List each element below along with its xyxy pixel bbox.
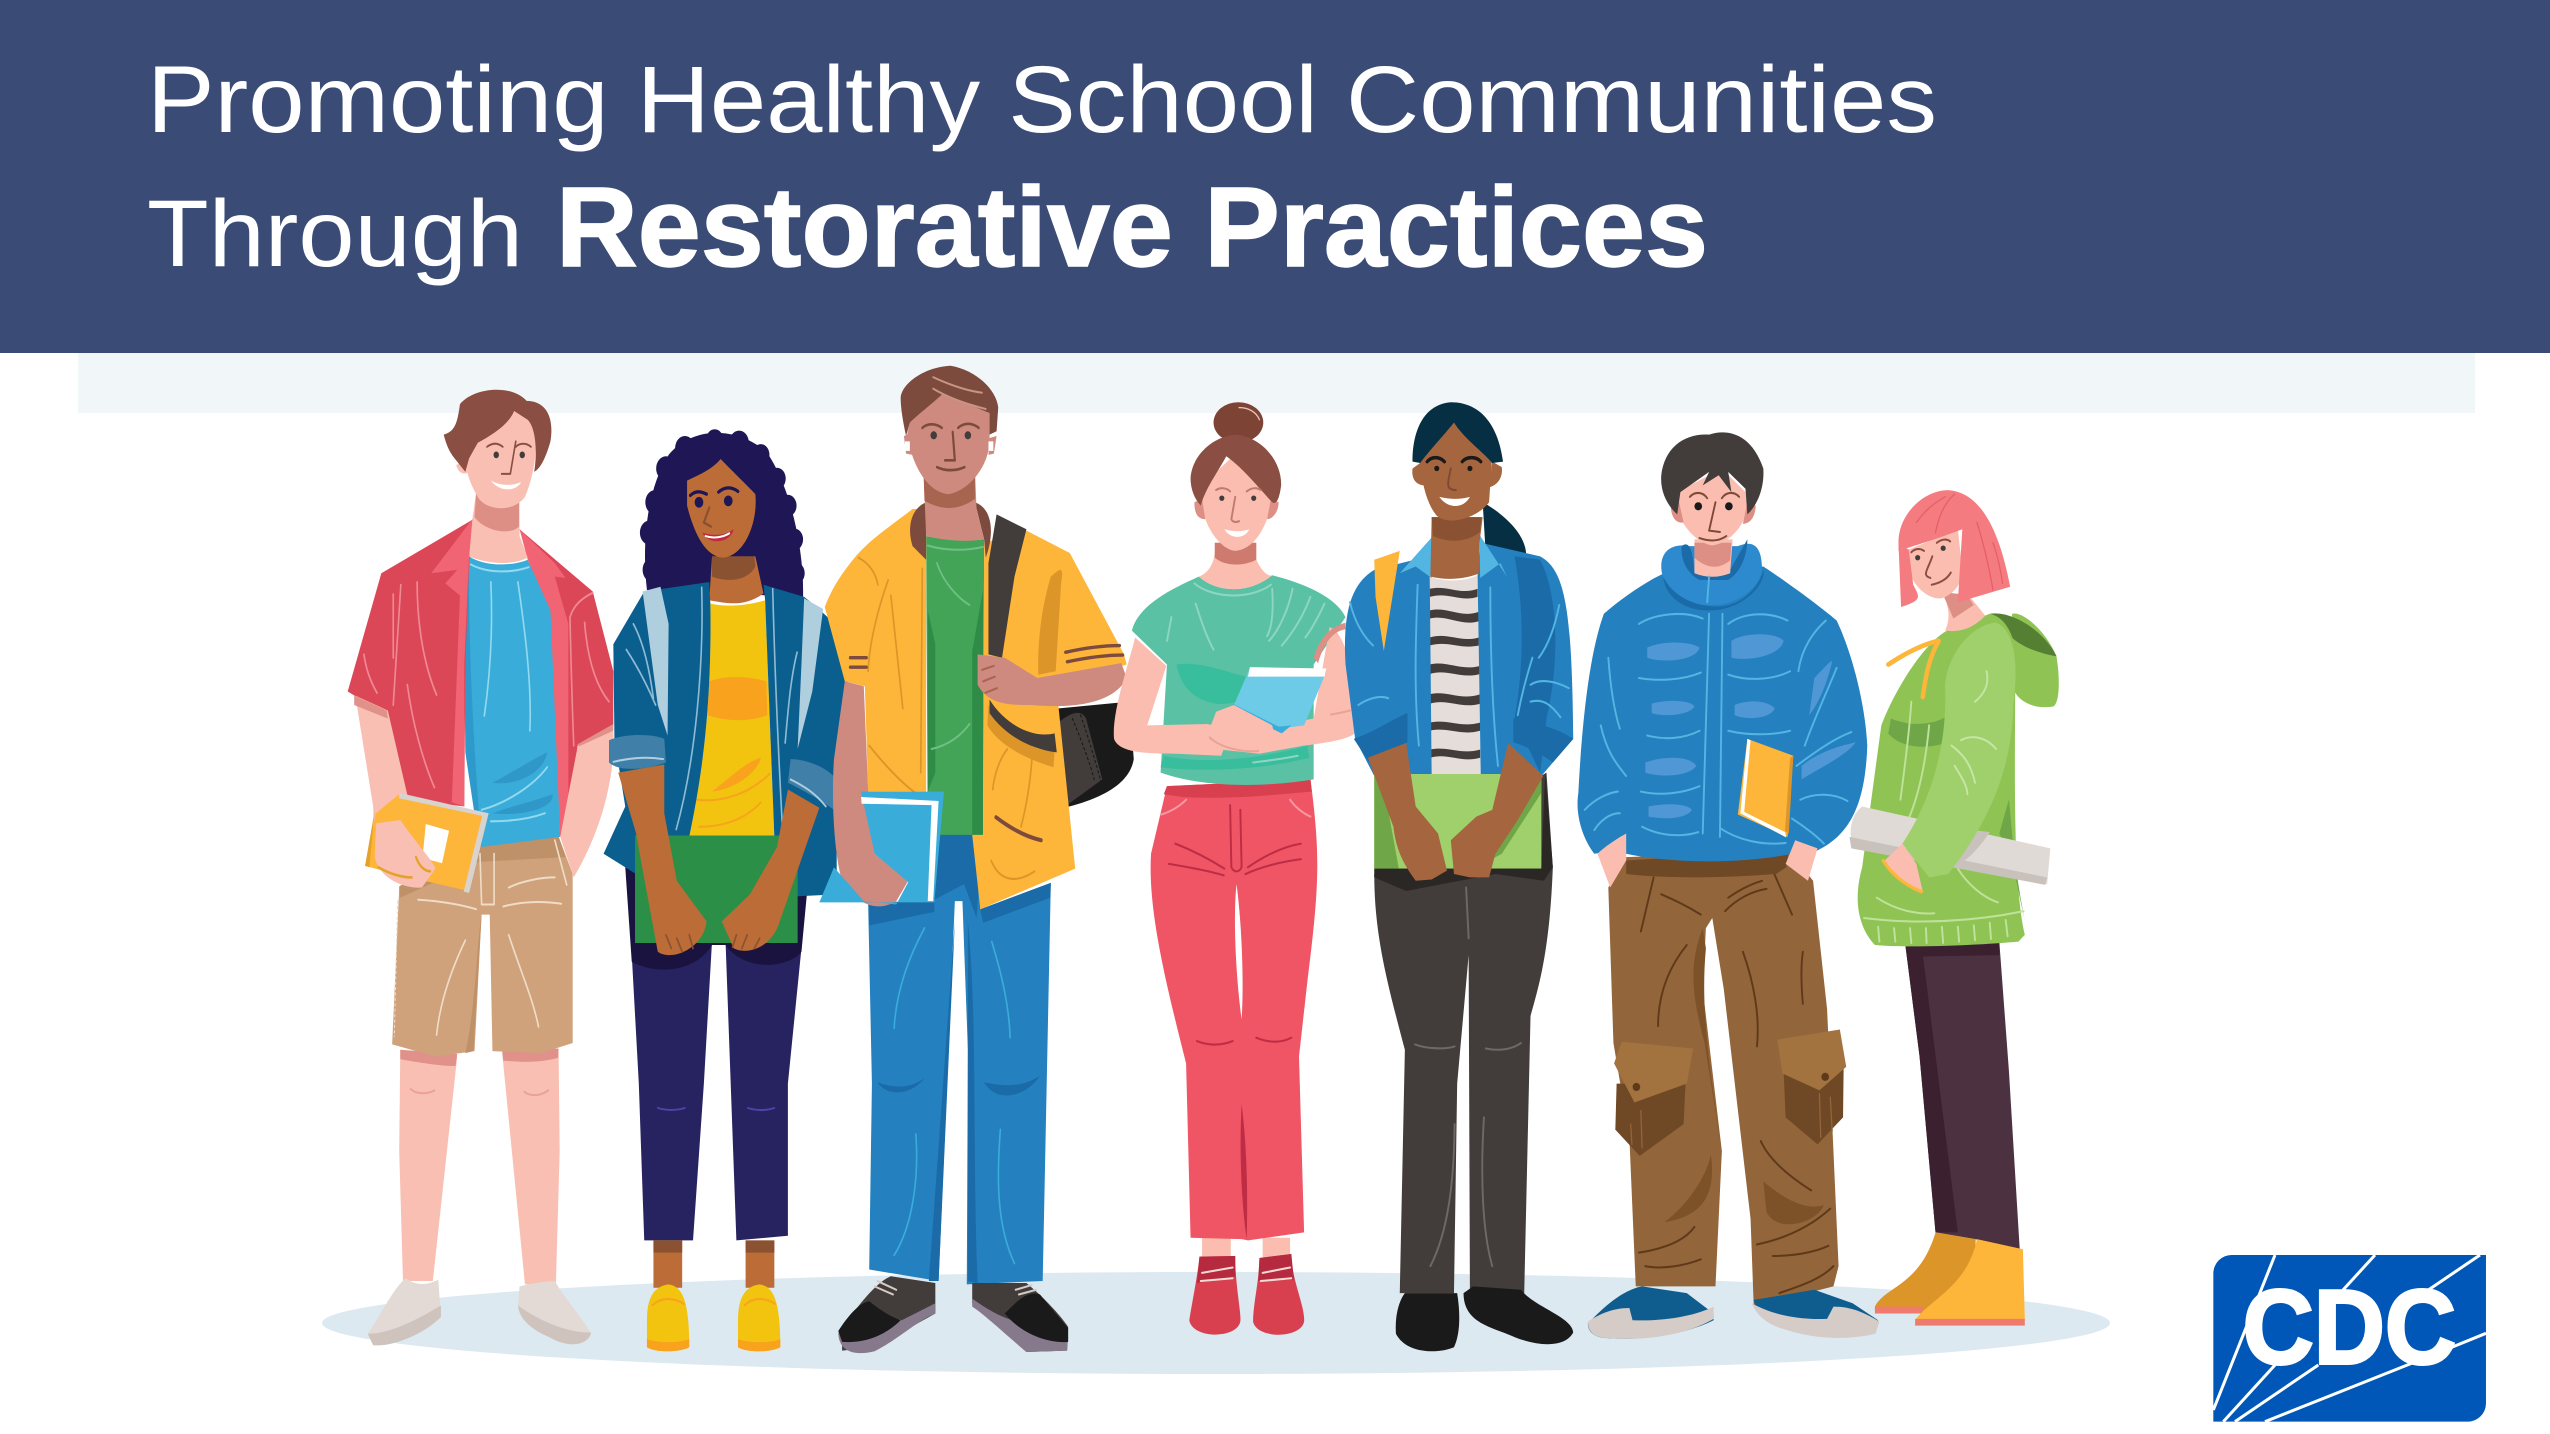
student 1: red shirt — [348, 390, 614, 1345]
student 4: teal shirt and coral trousers — [1114, 402, 1358, 1335]
header banner — [0, 0, 2550, 353]
ground shadow — [322, 1272, 2110, 1374]
students left group — [348, 366, 1134, 1353]
CDC logo: CDC — [2243, 1268, 2456, 1386]
title: Through — [147, 181, 523, 287]
student 5: denim jacket and striped top — [1345, 402, 1573, 1351]
student 7: green hoodie and pink hair — [1849, 490, 2059, 1326]
students right group — [1114, 402, 2059, 1351]
student 3: yellow jacket with backpack — [819, 366, 1134, 1353]
student 6: blue puffer and brown cargo trousers — [1578, 432, 1879, 1339]
title: Restorative Practices — [556, 164, 1708, 290]
student 2: yellow shirt and blue cardigan — [604, 429, 852, 1351]
pale band behind heads — [78, 353, 2475, 413]
CDC logo — [2213, 1255, 2486, 1422]
title — [147, 47, 1937, 290]
title: Promoting Healthy School Communities — [147, 47, 1937, 153]
